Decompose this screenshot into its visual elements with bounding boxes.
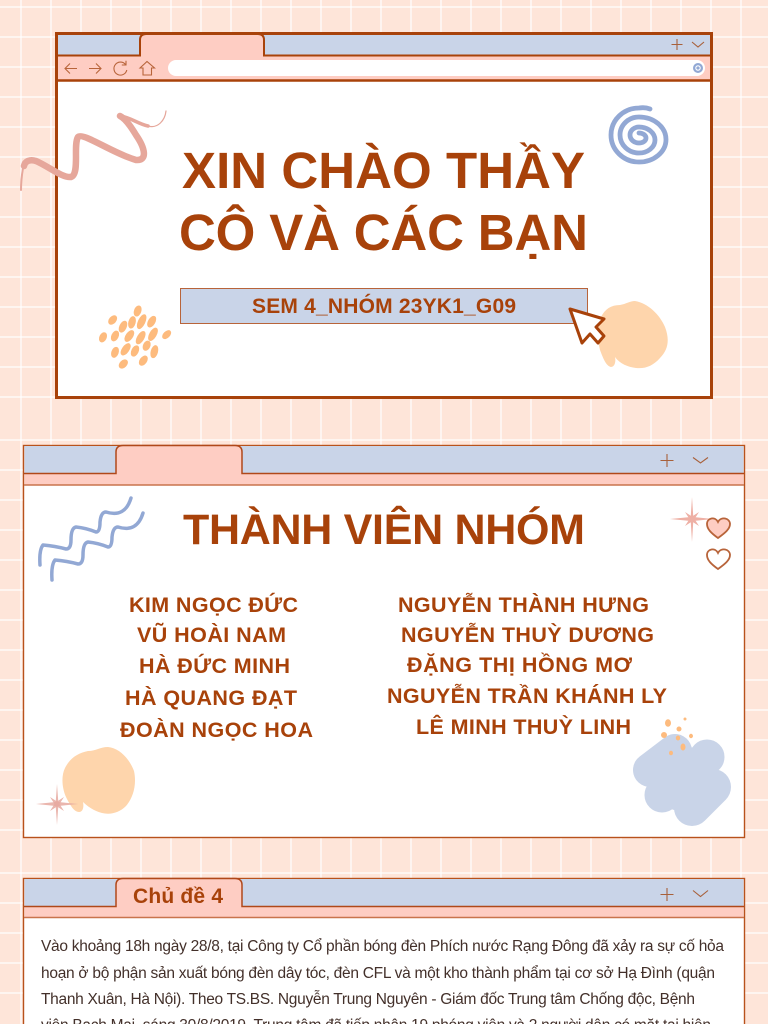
heading: members: THÀNH VIÊN NHÓM	[183, 505, 585, 554]
icon: mouse cursor	[570, 309, 604, 343]
names: right column: NGUYỄN THÀNH HƯNG	[398, 591, 649, 617]
names: right column	[387, 591, 667, 739]
icon: blue waves	[40, 498, 143, 580]
orange confetti	[661, 718, 693, 755]
toolbar band	[24, 473, 744, 485]
names: left column: HÀ QUANG ĐẠT	[125, 685, 297, 710]
names: left column: HÀ ĐỨC MINH	[139, 653, 290, 678]
title: XIN CHÀO THẦY	[182, 141, 585, 199]
names: right column: NGUYỄN TRẦN KHÁNH LY	[387, 682, 667, 708]
names: left column: KIM NGỌC ĐỨC	[129, 592, 298, 617]
body text: Thanh Xuân, Hà Nội). Theo TS.BS. Nguyễn Trung Nguyên - Giám đốc Trung tâm Chống độc, Bệnh	[41, 991, 695, 1008]
window body	[56, 34, 712, 398]
subtitle banner: SEM 4_NHÓM 23YK1_G09	[252, 294, 516, 318]
toolbar band	[24, 906, 744, 917]
browser tab	[57, 34, 711, 56]
body text: Vào khoảng 18h ngày 28/8, tại Công ty Cổ phần bóng đèn Phích nước Rạng Đông đã xảy ra sự cố hỏa	[41, 938, 724, 955]
icon: outline heart	[707, 549, 730, 569]
browser tab	[24, 446, 744, 474]
orange dot cluster	[98, 305, 172, 369]
orange blob	[598, 301, 668, 368]
orange blob with sparkle	[36, 747, 135, 825]
browser tab	[24, 878, 744, 906]
icon: search	[693, 63, 703, 73]
body text: hoạn ở bộ phận sản xuất bóng đèn dây tóc, đèn CFL và một kho thành phẩm tại cơ sở Hạ Đình (quận	[41, 965, 715, 982]
toolbar	[58, 55, 710, 80]
tab bar	[24, 879, 744, 906]
blue cloud blob	[645, 740, 724, 812]
names: left column: ĐOÀN NGỌC HOA	[120, 717, 313, 742]
icon: filled heart	[707, 518, 730, 538]
icon: pink ribbon squiggle	[21, 111, 166, 190]
title: CÔ VÀ CÁC BẠN	[179, 203, 588, 261]
tab label: Chủ đề 4	[133, 885, 223, 908]
window body	[24, 446, 744, 838]
icon: plus and chevron	[660, 454, 708, 467]
icon: plus and chevron	[672, 39, 704, 50]
icon: sparkle	[670, 497, 713, 542]
names: right column: LÊ MINH THUỲ LINH	[416, 714, 631, 739]
icon: blue spiral	[611, 108, 666, 162]
window body	[24, 878, 744, 1024]
names: left column: VŨ HOÀI NAM	[137, 622, 286, 647]
icon: plus and chevron	[660, 888, 708, 901]
names: right column: NGUYỄN THUỲ DƯƠNG	[401, 621, 654, 647]
panel: members window	[24, 446, 744, 838]
tab bar	[58, 35, 710, 55]
panel: greeting browser window	[56, 34, 712, 398]
address bar	[168, 60, 705, 76]
icons: navigation buttons	[65, 61, 154, 75]
panel: topic window	[24, 878, 744, 1024]
tab bar	[24, 446, 744, 473]
subtitle banner	[180, 288, 588, 324]
title	[179, 141, 588, 261]
body text	[41, 938, 724, 1024]
names: left column	[120, 592, 313, 742]
names: right column: ĐẶNG THỊ HỒNG MƠ	[407, 652, 633, 677]
